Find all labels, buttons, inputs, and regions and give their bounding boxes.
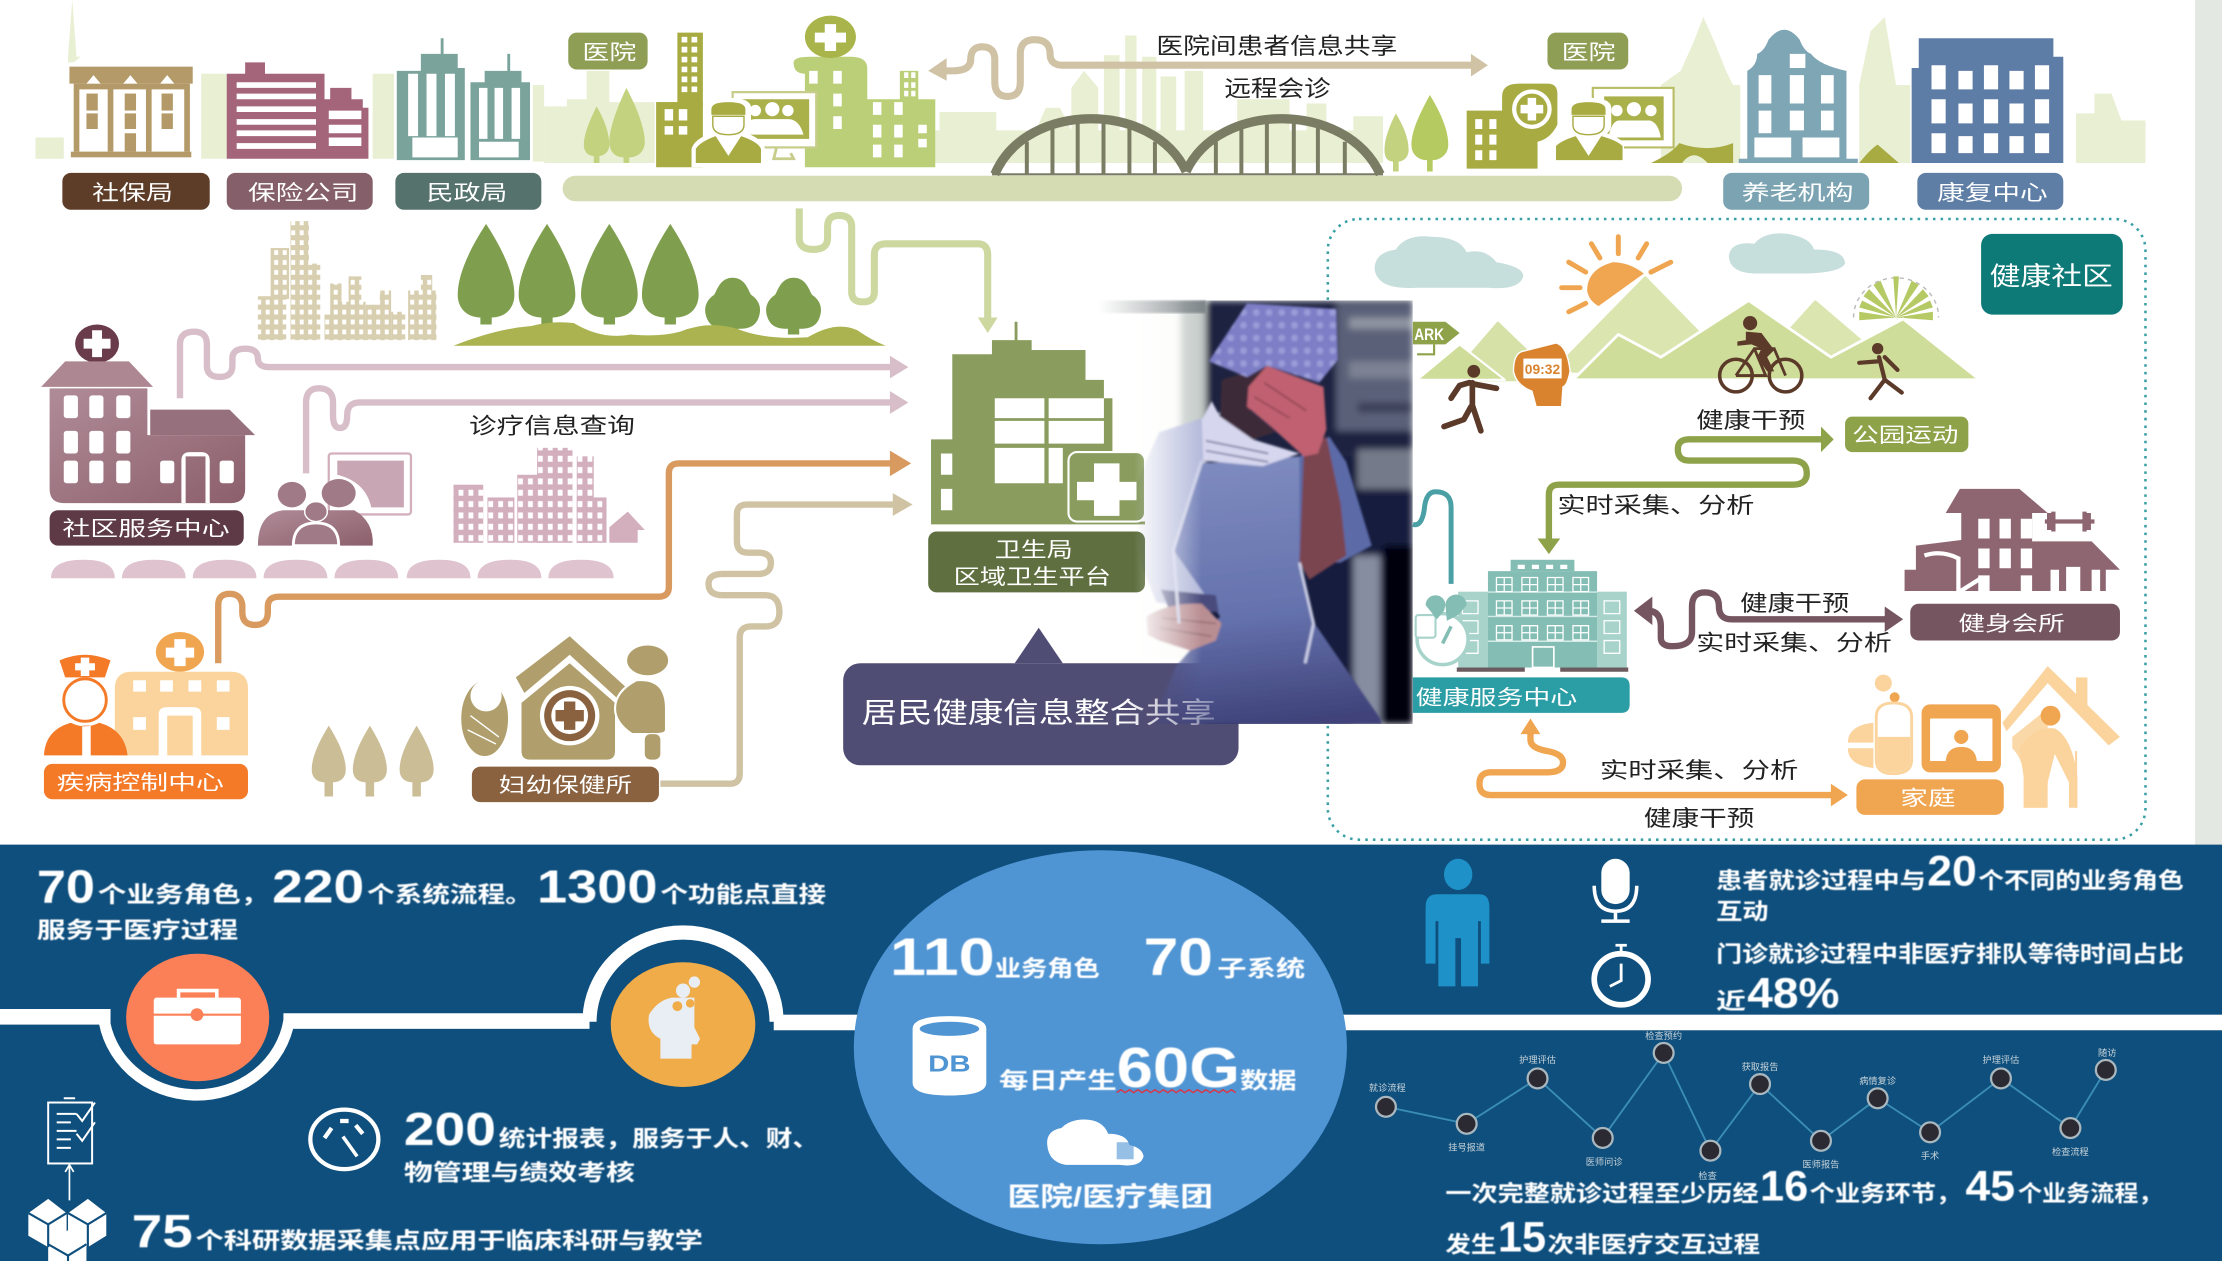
statistic: 110 roles 70 subsystems: 业务角色	[995, 955, 1100, 981]
statistic: 70 roles 220 flows 1300 functions: 个业务角色，	[98, 882, 269, 908]
label: rehabilitation	[1917, 173, 2063, 210]
icon: insurance company	[227, 62, 368, 159]
icon: hospital cluster right	[1467, 84, 1899, 169]
statistic: 75 research points: 个科研数据采集点应用于临床科研与教学	[196, 1227, 703, 1253]
text: information sharing: 医院间患者信息共享	[1156, 33, 1397, 59]
statistic: 16 steps 45 flows 15 interactions	[1445, 1163, 2162, 1261]
icon: row of domes	[51, 560, 614, 578]
statistic: 70 roles 220 flows 1300 functions: 服务于医疗过程	[37, 917, 238, 943]
arrow: family to health service centre	[1479, 719, 1848, 806]
arrow: teal stub	[1413, 492, 1451, 584]
label: hospital right	[1547, 33, 1628, 69]
label: civil affairs	[395, 173, 541, 210]
icon: bridge	[992, 119, 1383, 174]
statistic: 75 research points	[132, 1205, 703, 1257]
icon: gauge	[310, 1110, 378, 1169]
icon: community service centre	[41, 325, 255, 503]
statistic: 48 percent waiting: 门诊就诊过程中非医疗排队等待时间占比	[1716, 941, 2184, 967]
label: social security: 社保局	[92, 181, 173, 205]
icon: people and tablet	[258, 454, 411, 546]
arrow: fitness to health service centre	[1634, 592, 1903, 646]
statistic: 20 roles interaction: 个不同的业务角色	[1978, 868, 2184, 894]
label: health service centre	[1413, 677, 1630, 713]
statistic: 200 reports: 统计报表，服务于人、财、	[499, 1125, 819, 1151]
chart: patient journey network: 医师报告	[1803, 1159, 1839, 1170]
statistic: 70 roles 220 flows 1300 functions: 个系统流程。	[367, 882, 533, 908]
label: health bureau platform: 卫生局	[995, 538, 1073, 562]
statistic: 16 steps 45 flows 15 interactions: 45	[1966, 1163, 2015, 1210]
icon: hospital cluster left	[656, 16, 935, 167]
icon: trees left	[584, 88, 645, 163]
label: elderly care	[1723, 173, 1869, 210]
icon: rehabilitation centre	[1912, 38, 2063, 163]
statistic: 70 roles 220 flows 1300 functions: 70	[37, 861, 95, 913]
faint skyline	[35, 0, 2145, 163]
icon: sports watch: 09:32	[1525, 362, 1560, 378]
panel: hospital group circle	[854, 850, 1347, 1244]
chart: patient journey network: 检查流程	[2052, 1146, 2089, 1157]
icon: cubes	[28, 1199, 106, 1261]
statistic: 16 steps 45 flows 15 interactions: 16	[1760, 1163, 1808, 1210]
label: health service centre: 健康服务中心	[1416, 686, 1577, 709]
icon: health service centre building	[1416, 560, 1628, 670]
label: park exercise: 公园运动	[1852, 424, 1958, 447]
arrow: community to platform 1	[180, 332, 908, 398]
icon: beige city	[258, 221, 436, 340]
label: health bureau platform: 区域卫生平台	[954, 565, 1111, 589]
chart: patient journey network: 护理评估	[1983, 1054, 2019, 1065]
statistic: 48 percent waiting: 近	[1716, 988, 1746, 1014]
statistic: 16 steps 45 flows 15 interactions: 发生	[1445, 1232, 1496, 1258]
icon: fitness club	[1905, 489, 2120, 592]
photo: top edge vignette	[1098, 300, 1206, 313]
statistic: 70 roles 220 flows 1300 functions: 个功能点直接	[660, 882, 826, 908]
statistic: 70 roles 220 flows 1300 functions	[37, 861, 826, 943]
statistic: 110 roles 70 subsystems: 110	[890, 929, 995, 987]
statistic: 60G data daily: 数据	[1240, 1067, 1297, 1093]
label: park exercise	[1845, 417, 1968, 452]
chart: patient journey network: 获取报告	[1742, 1061, 1778, 1072]
text: health intervention fitness: 健康干预	[1740, 591, 1849, 616]
icon: microphone	[1594, 859, 1637, 921]
chart: patient journey network	[1369, 1030, 2116, 1181]
label: health bureau platform	[928, 531, 1145, 592]
icon: ferris wheel	[1854, 276, 1939, 320]
statistic: 200 reports: 物管理与绩效考核	[404, 1159, 635, 1185]
white timeline line	[0, 1009, 2222, 1030]
label: hospital right: 医院	[1562, 41, 1615, 65]
statistic: 70 roles 220 flows 1300 functions: 220	[272, 861, 364, 913]
icon: civil affairs bureau	[397, 38, 530, 160]
chart: patient journey network: 就诊流程	[1369, 1082, 1406, 1093]
text: health intervention park: 健康干预	[1696, 408, 1805, 433]
label: rehabilitation: 康复中心	[1937, 181, 2048, 205]
text: resident health information integration: 居民健康信息整合共享	[862, 698, 1216, 730]
icon: database: DB	[928, 1050, 971, 1076]
statistic: 60G data daily: 每日产生	[999, 1067, 1117, 1093]
statistic: 200 reports: 200	[404, 1103, 496, 1155]
statistic: 20 roles interaction: 患者就诊过程中与	[1716, 868, 1926, 894]
photo: surgeon	[1136, 300, 1413, 724]
chart: patient journey network: 随访	[2098, 1047, 2116, 1058]
statistic: 200 reports	[404, 1103, 819, 1185]
text: remote consultation: 远程会诊	[1224, 75, 1331, 101]
label: fitness club: 健身会所	[1958, 613, 2065, 636]
label: community service centre: 社区服务中心	[62, 518, 230, 541]
statistic: 20 roles interaction: 20	[1927, 849, 1977, 896]
label: family	[1856, 779, 2004, 815]
arrow: disease control to platform	[218, 451, 911, 663]
statistic: 75 research points: 75	[132, 1205, 193, 1257]
arrow: community to platform 2	[306, 388, 908, 473]
icon: cloud	[1047, 1120, 1144, 1165]
label: disease control centre	[44, 764, 248, 799]
text: clinical information query: 诊疗信息查询	[469, 414, 635, 439]
statistic: 16 steps 45 flows 15 interactions: 一次完整就诊过程至少历经	[1445, 1181, 1759, 1207]
icon: sun	[1562, 237, 1671, 312]
label: disease control centre: 疾病控制中心	[57, 771, 224, 794]
label: civil affairs: 民政局	[427, 181, 507, 205]
icon: toolbox circle	[126, 954, 269, 1081]
text: hospital group: 医院/医疗集团	[1008, 1182, 1213, 1212]
chart: patient journey network: 病情复诊	[1859, 1075, 1897, 1086]
statistic: 110 roles 70 subsystems	[890, 929, 1306, 987]
statistic: 20 roles interaction: 互动	[1716, 899, 1769, 925]
icon: park sign: ARK	[1414, 325, 1445, 344]
arrow: maternal health to platform	[660, 493, 913, 784]
arrow: clipboard to cubes	[65, 1165, 74, 1200]
chart: patient journey network: 检查预约	[1645, 1030, 1682, 1041]
statistic: 110 roles 70 subsystems: 子系统	[1217, 955, 1306, 981]
icon: park sign	[1413, 322, 1460, 354]
label: elderly care: 养老机构	[1742, 181, 1854, 205]
icon: cyclist	[1720, 316, 1802, 392]
icon: disease control centre	[44, 632, 248, 755]
callout: resident health information box	[843, 628, 1239, 765]
icon: green trees and hill	[453, 224, 886, 346]
arrow: road to platform	[799, 208, 998, 333]
chart: patient journey network: 手术	[1921, 1150, 1939, 1161]
chart: patient journey network: 护理评估	[1519, 1054, 1556, 1065]
icon: stopwatch	[1594, 945, 1648, 1005]
label: fitness club	[1910, 604, 2120, 641]
icon: family home care	[1848, 666, 2120, 808]
label: health community	[1981, 234, 2123, 315]
text: realtime collection park: 实时采集、分析	[1557, 493, 1754, 518]
text: realtime collection family: 实时采集、分析	[1600, 758, 1798, 783]
statistic: 20 roles interaction	[1716, 849, 2184, 925]
text: realtime collection fitness: 实时采集、分析	[1696, 630, 1892, 655]
statistic: 16 steps 45 flows 15 interactions: 15	[1498, 1214, 1546, 1261]
panel: blue statistics band	[0, 845, 2222, 1261]
icon: pink city	[453, 448, 645, 543]
right grey strip	[2195, 0, 2222, 846]
label: social security	[62, 173, 210, 210]
label: maternal care: 妇幼保健所	[499, 774, 632, 797]
arrow: hospital information sharing	[928, 40, 1488, 96]
label: maternal care	[472, 767, 659, 802]
icon: brain head circle	[611, 962, 755, 1087]
label: family: 家庭	[1900, 787, 1956, 810]
icon: clouds	[1375, 233, 1845, 288]
statistic: 60G data daily	[999, 1037, 1297, 1100]
icon: runner left	[1444, 365, 1496, 431]
label: insurance company: 保险公司	[248, 181, 359, 205]
text: health intervention family: 健康干预	[1644, 806, 1754, 831]
icon: mountains	[1417, 278, 1980, 380]
icon: social security bureau	[69, 67, 193, 157]
panel: health community border	[1328, 219, 2145, 840]
icon: sports watch	[1513, 343, 1570, 407]
statistic: 16 steps 45 flows 15 interactions: 个业务环节，	[1810, 1181, 1961, 1207]
statistic: 70 roles 220 flows 1300 functions: 1300	[537, 861, 658, 913]
icon: central health bureau building	[931, 322, 1145, 524]
icon: clipboard	[48, 1098, 95, 1163]
chart: patient journey network: 检查	[1698, 1170, 1717, 1181]
icon: beige trees	[312, 726, 434, 796]
icon: database	[913, 1016, 986, 1095]
arrow: park to health service centre	[1538, 427, 1834, 554]
statistic: 110 roles 70 subsystems: 70	[1144, 929, 1213, 987]
statistic: 60G data daily: 60G	[1117, 1037, 1240, 1100]
icon: trees right	[1384, 95, 1448, 172]
label: health community: 健康社区	[1990, 263, 2113, 291]
icon: runner right	[1859, 343, 1902, 398]
label: hospital left: 医院	[582, 41, 636, 65]
chart: patient journey network: 挂号报道	[1448, 1142, 1485, 1153]
label: community service centre	[50, 510, 244, 546]
road bar	[563, 176, 1682, 201]
icon: maternal and child care house	[461, 636, 668, 760]
icon: person	[1426, 859, 1489, 986]
icon: elderly care institution	[1739, 30, 1858, 163]
chart: patient journey network: 医师问诊	[1586, 1156, 1623, 1167]
statistic: 16 steps 45 flows 15 interactions: 个业务流程，	[2018, 1181, 2162, 1207]
label: insurance company	[227, 173, 373, 210]
statistic: 48 percent waiting: 48%	[1747, 971, 1839, 1018]
label: hospital left	[568, 33, 648, 69]
statistic: 16 steps 45 flows 15 interactions: 次非医疗交互过程	[1547, 1232, 1760, 1258]
statistic: 48 percent waiting	[1716, 941, 2184, 1018]
